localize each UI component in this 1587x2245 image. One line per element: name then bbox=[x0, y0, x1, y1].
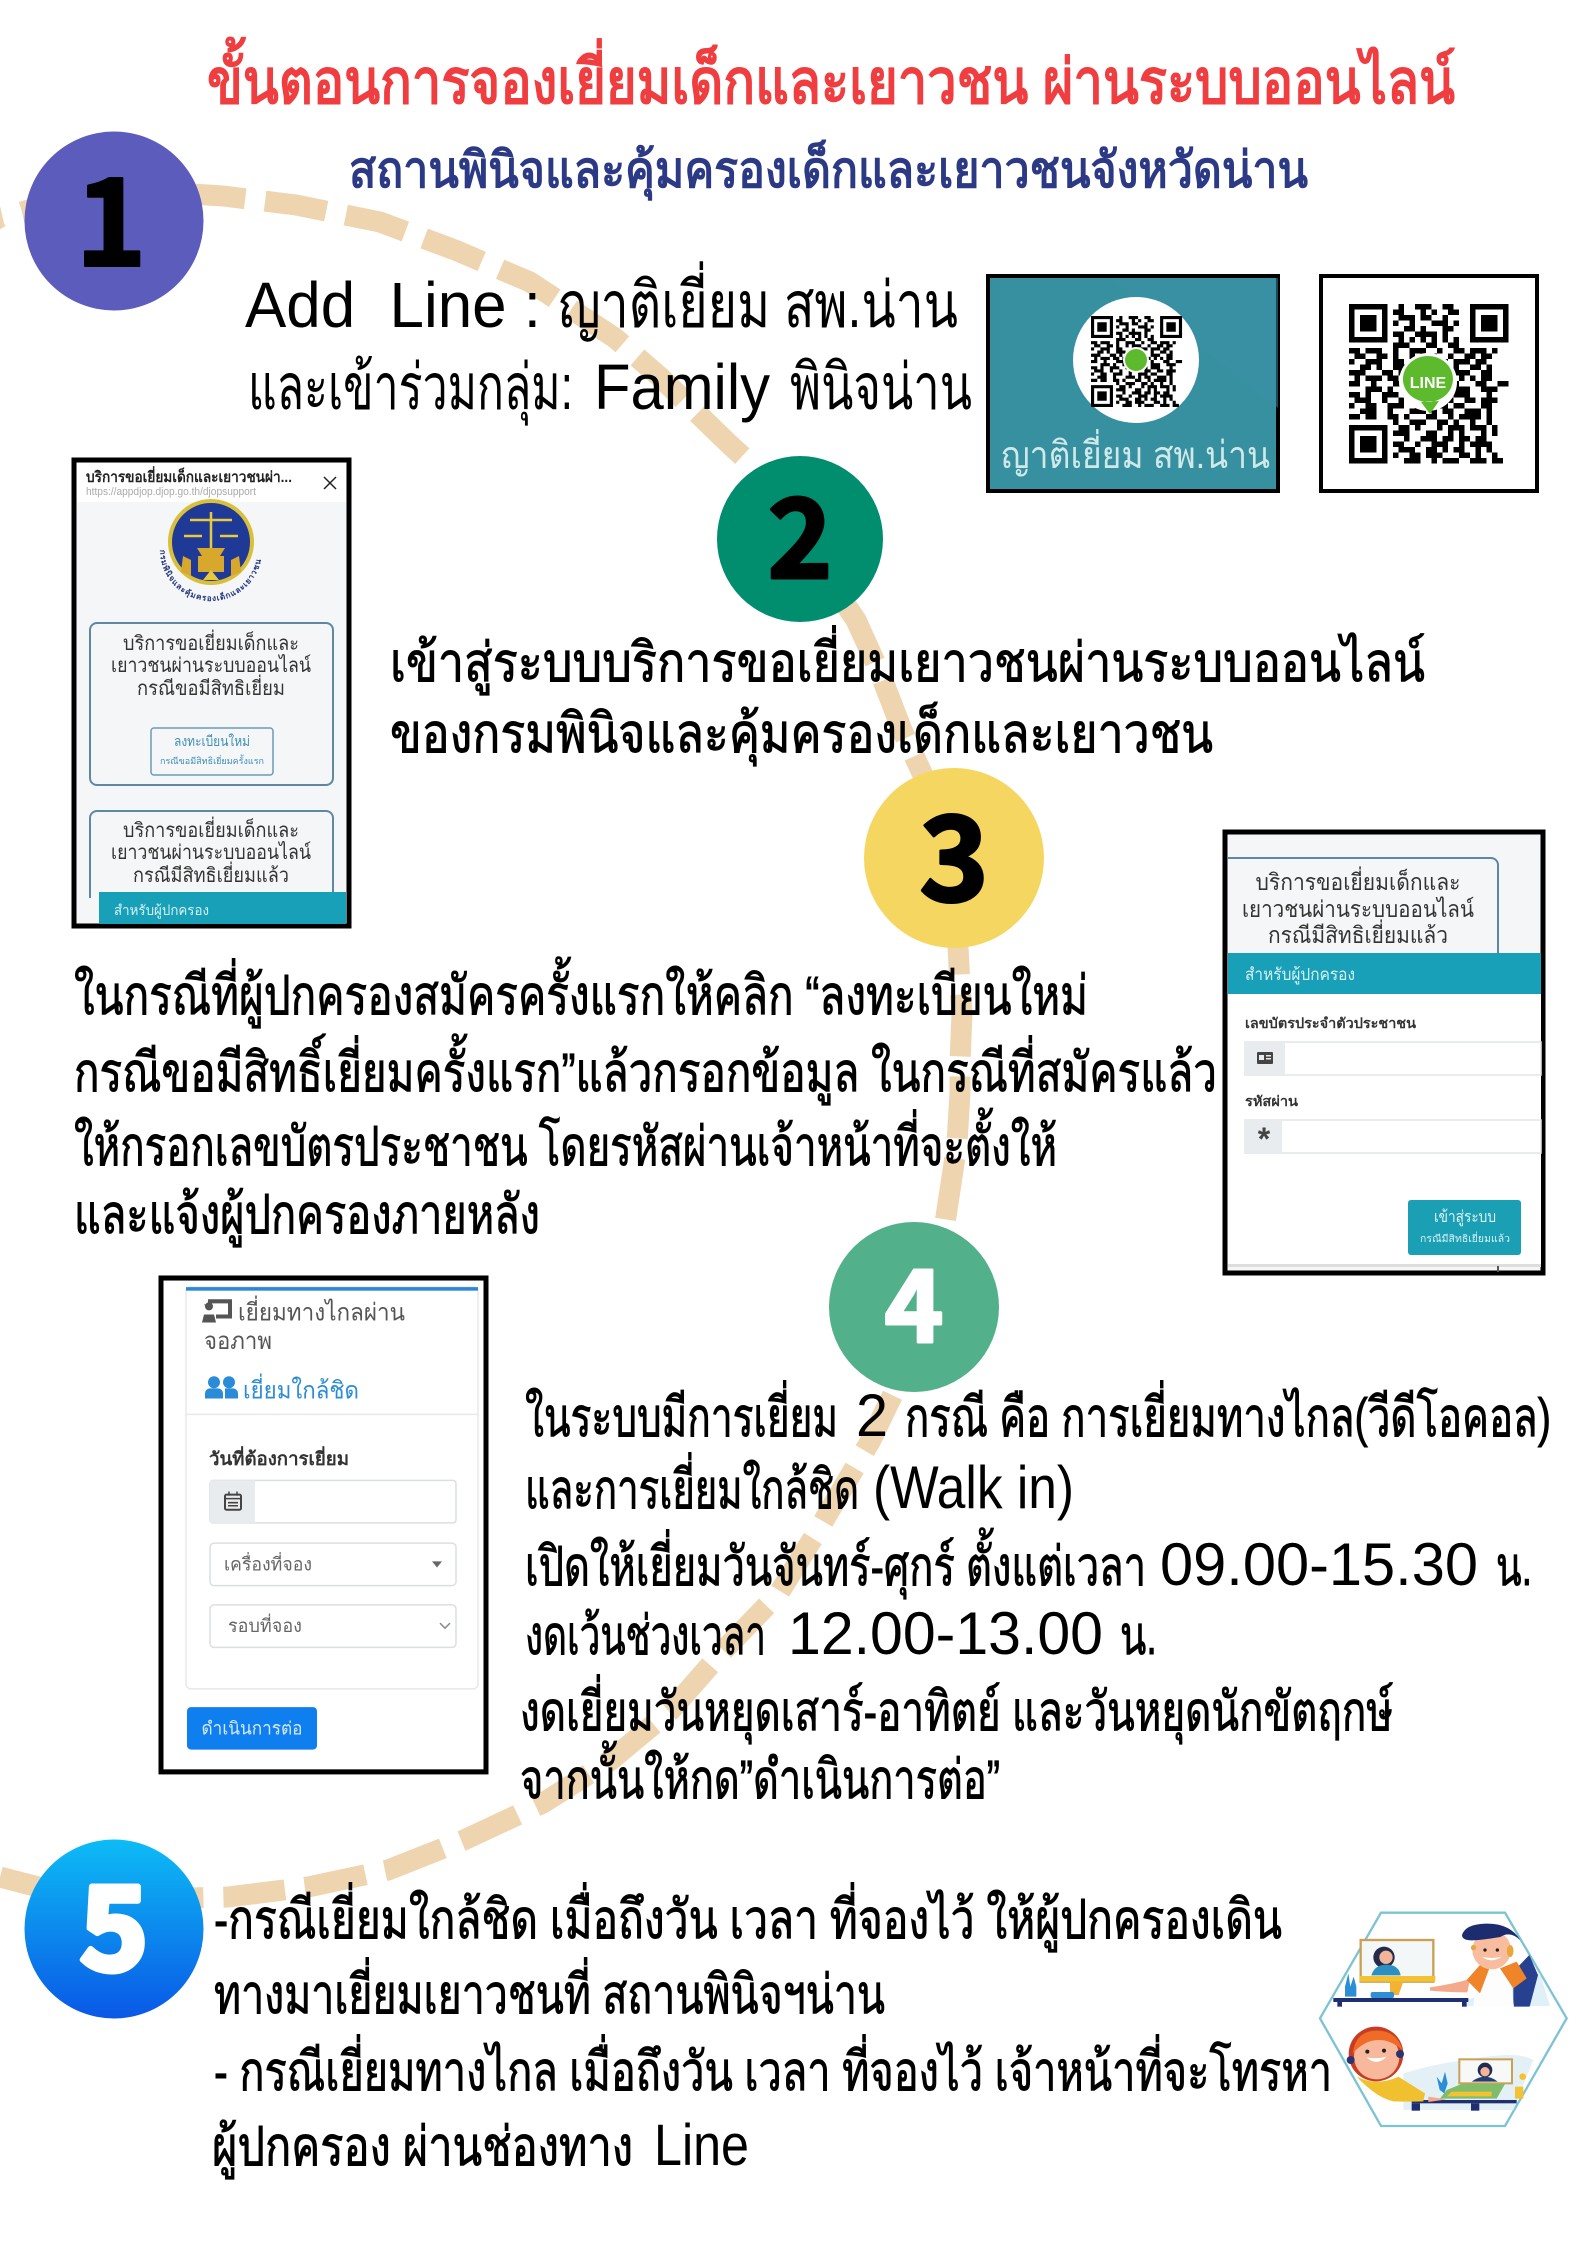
select: round bbox=[210, 1605, 456, 1647]
upper scene bbox=[1333, 1924, 1550, 2007]
step 4 badge bbox=[829, 1222, 999, 1392]
card: new registration bbox=[90, 623, 333, 785]
subtitle: สถานพินิจและคุ้มครองเด็กและเยาวชนจังหวัดน่าน bbox=[349, 139, 1308, 201]
guardian bar: สำหรับผู้ปกครอง bbox=[1245, 965, 1355, 985]
select: round: รอบที่จอง bbox=[228, 1613, 302, 1636]
card: existing rights: เยาวชนผ่านระบบออนไลน์ bbox=[111, 841, 311, 864]
screenshot: guardian login: กรณีมีสิทธิเยี่ยมแล้ว bbox=[1268, 919, 1448, 948]
icon: department seal bbox=[160, 499, 262, 602]
continue button bbox=[187, 1707, 317, 1750]
step 4 text bbox=[520, 1380, 1551, 1810]
tab: close visit: เยี่ยมใกล้ชิด bbox=[243, 1373, 359, 1404]
step 4 badge: 4 bbox=[884, 1226, 944, 1371]
card: existing rights: บริการขอเยี่ยมเด็กและ bbox=[123, 816, 299, 842]
screenshot: visit form bbox=[161, 1278, 486, 1772]
step 3 text bbox=[74, 957, 1217, 1247]
tab: remote visit: จอภาพ bbox=[204, 1328, 272, 1355]
step 3 text: และแจ้งผู้ปกครองภายหลัง bbox=[74, 1185, 540, 1247]
line qr card: teal bbox=[988, 276, 1278, 491]
step 1 text: Family bbox=[594, 351, 770, 423]
password field: รหัสผ่าน bbox=[1245, 1093, 1298, 1109]
icon: department seal: กรมพินิจและคุ้มครองเด็กและเยาวชน bbox=[160, 550, 262, 602]
step 5 text: Line bbox=[654, 2113, 749, 2178]
step 3 text: ให้กรอกเลขบัตรประชาชน โดยรหัสผ่านเจ้าหน้าที่จะตั้งให้ bbox=[74, 1108, 1057, 1177]
step 5 text: ทางมาเยี่ยมเยาวชนที่ สถานพินิจฯน่าน bbox=[214, 1957, 885, 2025]
screenshot: service selection bbox=[72, 458, 352, 928]
card: new registration: กรณีขอมีสิทธิเยี่ยมครั้งแรก bbox=[160, 754, 264, 766]
step 2 badge: 2 bbox=[768, 450, 832, 610]
card: existing rights bbox=[90, 811, 333, 898]
step 3 badge: 3 bbox=[919, 764, 989, 935]
tab: remote visit: เยี่ยมทางไกลผ่าน bbox=[238, 1295, 405, 1327]
step 4 text: 09.00-15.30 bbox=[1160, 1531, 1478, 1598]
step 3 badge bbox=[864, 764, 1044, 948]
line qr card: white: LINE bbox=[1410, 375, 1447, 392]
card: new registration: กรณีขอมีสิทธิเยี่ยม bbox=[137, 674, 285, 700]
illustration: online visit hexagon bbox=[1320, 1913, 1567, 2126]
tab: remote visit bbox=[202, 1295, 405, 1355]
screenshot: guardian login bbox=[1225, 832, 1543, 1273]
step 1 badge bbox=[24, 125, 204, 310]
guardian bar: สำหรับผู้ปกครอง bbox=[114, 902, 209, 919]
card: existing rights: กรณีมีสิทธิเยี่ยมแล้ว bbox=[133, 861, 289, 887]
step 4 text: ในระบบมีการเยี่ยม bbox=[525, 1380, 838, 1448]
screenshot: service selection: บริการขอเยี่ยมเด็กและเยาวชนผ่า... bbox=[86, 466, 292, 486]
screenshot: guardian login: บริการขอเยี่ยมเด็กและ bbox=[1256, 866, 1460, 895]
step 3 text: ในกรณีที่ผู้ปกครองสมัครครั้งแรกให้คลิก “ลงทะเบียนใหม่ bbox=[74, 957, 1088, 1028]
date field: วันที่ต้องการเยี่ยม bbox=[209, 1446, 349, 1469]
login button: เข้าสู่ระบบ bbox=[1434, 1208, 1496, 1227]
step 1 text: ญาติเยี่ยม สพ.น่าน bbox=[558, 261, 958, 341]
step 5 text: -กรณีเยี่ยมใกล้ชิด เมื่อถึงวัน เวลา ที่จองไว้ ให้ผู้ปกครองเดิน bbox=[214, 1882, 1282, 1952]
step 1 text: และเข้าร่วมกลุ่ม: bbox=[248, 351, 573, 426]
step 2 badge bbox=[717, 450, 883, 622]
password field bbox=[1245, 1093, 1541, 1157]
card: new registration: ลงทะเบียนใหม่ bbox=[174, 733, 250, 749]
step 4 text: น. bbox=[1120, 1606, 1157, 1666]
continue button: ดำเนินการต่อ bbox=[202, 1718, 303, 1738]
screenshot: service selection: https://appdjop.djop.go.th/djopsupport bbox=[86, 486, 256, 498]
step 1 text: พินิจน่าน bbox=[790, 351, 972, 423]
step 4 text: จากนั้นให้กด”ดำเนินการต่อ” bbox=[520, 1741, 1000, 1810]
step 3 text: กรณีขอมีสิทธิ์เยี่ยมครั้งแรก”แล้วกรอกข้อมูล ในกรณีที่สมัครแล้ว bbox=[74, 1033, 1217, 1105]
step 1 text bbox=[245, 261, 972, 426]
select: device bbox=[210, 1543, 456, 1586]
guardian bar bbox=[1228, 953, 1541, 994]
guardian bar bbox=[99, 892, 346, 924]
step 5 text: ผู้ปกครอง ผ่านช่องทาง bbox=[212, 2117, 633, 2179]
step 2 text: เข้าสู่ระบบบริการขอเยี่ยมเยาวชนผ่านระบบออนไลน์ bbox=[390, 625, 1425, 695]
login button: กรณีมีสิทธิเยี่ยมแล้ว bbox=[1420, 1231, 1510, 1245]
tab: close visit bbox=[205, 1373, 359, 1404]
step 2 text: ของกรมพินิจและคุ้มครองเด็กและเยาวชน bbox=[390, 702, 1213, 767]
select: device: เครื่องที่จอง bbox=[224, 1551, 312, 1575]
step 4 text: และการเยี่ยมใกล้ชิด bbox=[525, 1452, 859, 1520]
step 5 text bbox=[212, 1882, 1332, 2179]
icon: close bbox=[324, 477, 336, 489]
step 5 badge bbox=[24, 1836, 204, 2018]
step 4 text: เปิดให้เยี่ยมวันจันทร์-ศุกร์ ตั้งแต่เวลา bbox=[525, 1528, 1146, 1600]
step 1 text: Add Line : bbox=[245, 269, 541, 341]
step 4 text: 2 bbox=[856, 1382, 888, 1449]
step 2 text bbox=[390, 625, 1425, 767]
card: new registration: บริการขอเยี่ยมเด็กและ bbox=[123, 629, 299, 655]
screenshot: guardian login: เยาวชนผ่านระบบออนไลน์ bbox=[1242, 896, 1474, 922]
id field bbox=[1245, 1015, 1541, 1075]
step 4 text: (Walk in) bbox=[873, 1454, 1074, 1521]
id field: เลขบัตรประจำตัวประชาชน bbox=[1245, 1015, 1416, 1031]
step 4 text: น. bbox=[1496, 1537, 1532, 1597]
password field: * bbox=[1258, 1121, 1271, 1157]
date field bbox=[209, 1446, 456, 1523]
step 4 text: 12.00-13.00 bbox=[788, 1600, 1103, 1667]
lower scene bbox=[1347, 2027, 1533, 2111]
login button bbox=[1408, 1200, 1521, 1255]
line qr card: white bbox=[1321, 276, 1537, 491]
step 4 text: งดเว้นช่วงเวลา bbox=[525, 1606, 766, 1666]
line qr card: teal: ญาติเยี่ยม สพ.น่าน bbox=[1001, 429, 1270, 477]
card: new registration: เยาวชนผ่านระบบออนไลน์ bbox=[111, 654, 311, 677]
dashed timeline path bbox=[0, 192, 962, 1900]
step 5 badge: 5 bbox=[80, 1836, 148, 2004]
step 1 badge: 1 bbox=[75, 125, 147, 302]
